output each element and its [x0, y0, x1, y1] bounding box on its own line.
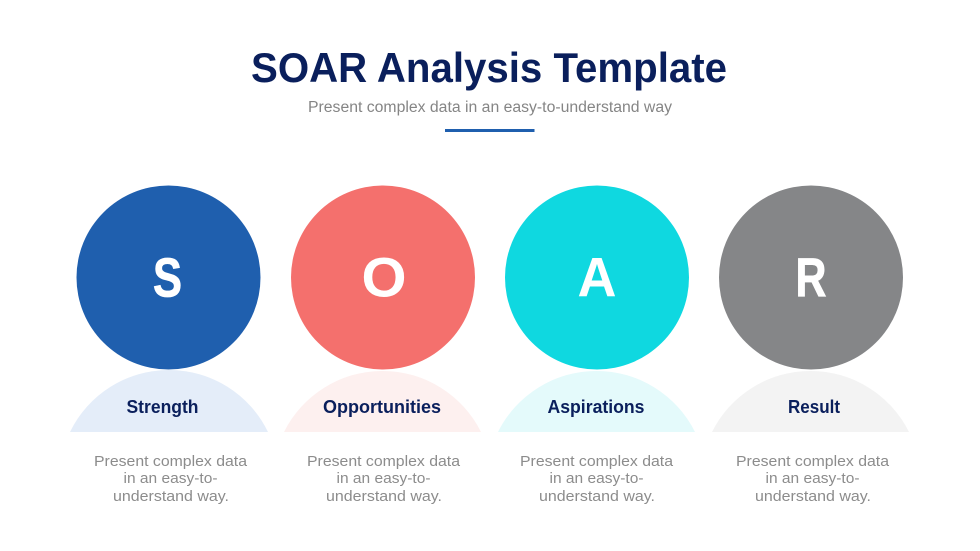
panel: result [712, 186, 909, 505]
text: opportunities description [307, 453, 461, 505]
heading: strength: Strength [126, 397, 198, 417]
reflection arc: strength [70, 370, 268, 432]
circle: A [505, 186, 689, 370]
panel: strength [70, 186, 268, 505]
reflection arc: result [712, 371, 909, 432]
circle: S [76, 186, 260, 370]
text: strength description: Present complex data [94, 453, 248, 470]
letter O: O [362, 246, 406, 308]
text: result description [736, 453, 890, 505]
text: result description: Present complex data [736, 453, 890, 470]
subtitle: Present complex data in an easy-to-understand way [308, 99, 672, 116]
text: opportunities description: Present complex data [307, 453, 461, 470]
title underline [445, 129, 534, 132]
text: opportunities description: in an easy-to- [336, 470, 430, 487]
text: strength description: understand way. [113, 488, 229, 505]
text: result description: in an easy-to- [766, 470, 860, 487]
title: SOAR Analysis Template [251, 44, 727, 91]
circle: R [719, 186, 903, 370]
heading: aspirations: Aspirations [548, 397, 644, 417]
text: strength description [94, 453, 248, 505]
text: aspirations description: Present complex data [520, 453, 674, 470]
text: strength description: in an easy-to- [124, 470, 218, 487]
text: result description: understand way. [755, 488, 871, 505]
letter S: S [153, 246, 182, 308]
panel: opportunities [284, 186, 481, 505]
heading: opportunities: Opportunities [323, 397, 441, 417]
text: aspirations description [520, 453, 674, 505]
text: opportunities description: understand way. [326, 488, 442, 505]
reflection arc: opportunities [284, 371, 481, 432]
letter A: A [578, 246, 616, 308]
letter R: R [796, 246, 826, 308]
text: aspirations description: in an easy-to- [550, 470, 644, 487]
circle: O [291, 186, 475, 370]
reflection arc: aspirations [498, 371, 695, 432]
heading: result: Result [788, 397, 840, 417]
panel: aspirations [498, 186, 695, 505]
text: aspirations description: understand way. [539, 488, 655, 505]
